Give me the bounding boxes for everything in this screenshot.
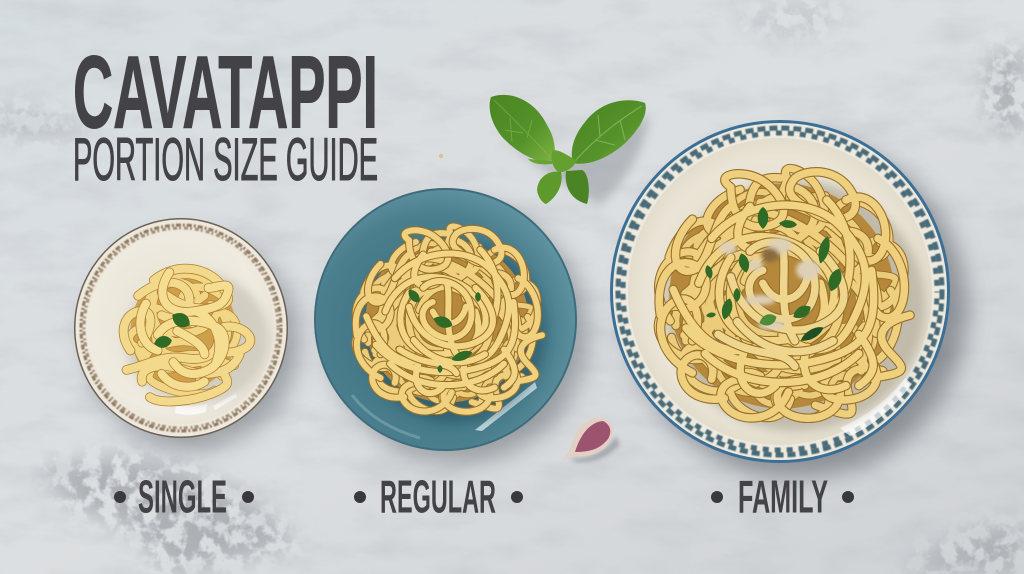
herb leaves [704, 207, 845, 344]
label: family [711, 470, 854, 522]
herb leaves [153, 309, 193, 349]
basil sprig [490, 95, 650, 205]
title [73, 34, 378, 193]
crumb [439, 154, 443, 158]
herb leaves [405, 287, 481, 373]
label: family: FAMILY [738, 470, 828, 522]
label: single [114, 470, 254, 522]
basil leaf: large left [490, 95, 555, 161]
flower petal [561, 418, 620, 462]
label: regular: REGULAR [380, 470, 496, 522]
decorative rim: brown pattern [81, 225, 281, 431]
basil bud [551, 150, 577, 172]
decorative rim: blue leaf pattern [618, 128, 942, 455]
label: single: SINGLE [138, 470, 227, 522]
grated cheese [719, 238, 820, 330]
plate: regular [314, 188, 588, 463]
basil leaf: small left [537, 172, 562, 204]
pasta: single portion [124, 269, 250, 401]
pasta: family portion [621, 134, 948, 459]
text: PORTION SIZE GUIDE [73, 126, 378, 193]
pasta: regular portion [328, 201, 570, 442]
basil leaf: small right [566, 170, 589, 204]
plate: single [74, 218, 299, 448]
heading: CAVATAPPI: CAVATAPPI [73, 34, 378, 150]
basil leaf: large right [572, 100, 646, 164]
label: regular [354, 470, 523, 522]
plate: family [610, 120, 967, 478]
